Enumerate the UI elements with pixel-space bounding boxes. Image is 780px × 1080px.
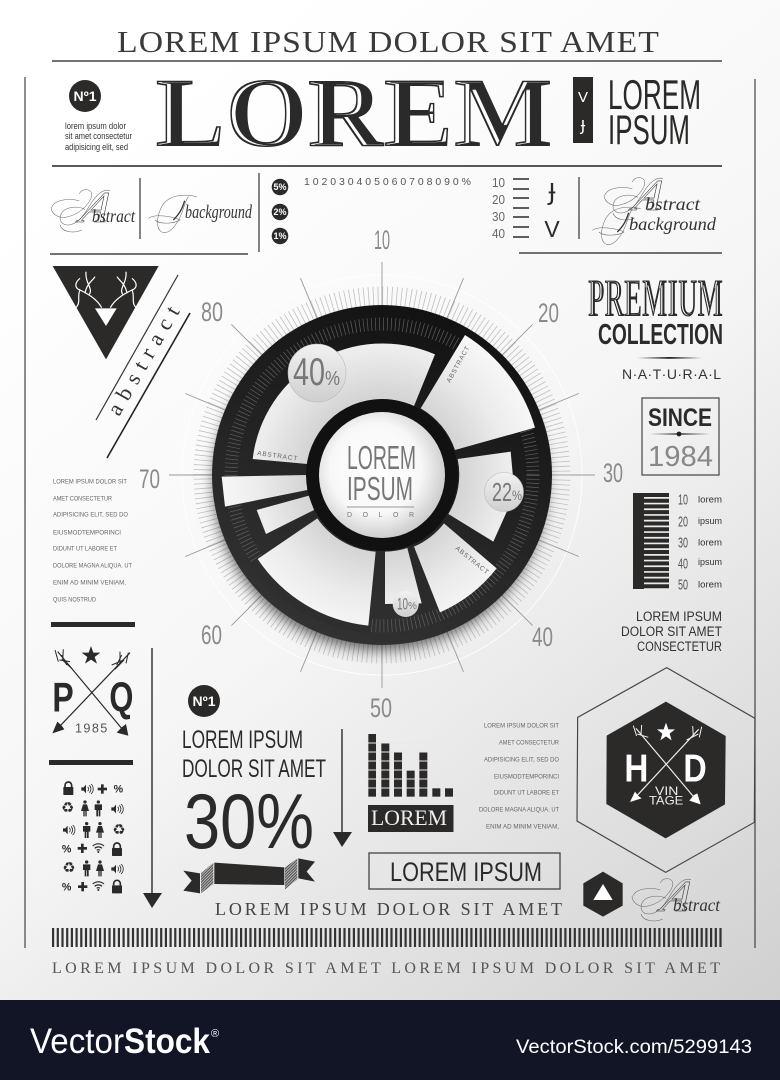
- badge: No 1 top: [69, 80, 101, 112]
- PQ crossed arrows emblem: Q: [109, 675, 133, 721]
- bubble 10%: 10: [397, 594, 408, 614]
- right paragraph: EIUSMODTEMPORINCI: [494, 774, 559, 780]
- script: Abstract: A: [71, 183, 122, 232]
- thick rules: [49, 622, 135, 765]
- title side text: [608, 71, 701, 153]
- hexagon HD vintage emblem: [577, 668, 755, 872]
- percent bullets: 2%: [273, 207, 287, 217]
- bubble 40%: [288, 344, 346, 402]
- dark tag: [573, 77, 593, 143]
- diagonal label: abstract: abstract: [102, 301, 184, 420]
- dial labels: 60: [201, 620, 222, 650]
- icon grid: ♻: [62, 860, 76, 877]
- script: Abstract lower: A: [652, 872, 703, 921]
- long arrow left: [143, 648, 162, 908]
- arrow middle: [333, 729, 352, 847]
- title side text: LOREM: [608, 71, 701, 118]
- wedge labels: ABSTRACT: [454, 545, 490, 576]
- right paragraph: ADIPISICING ELIT, SED DO: [484, 756, 559, 764]
- wedge labels: ABSTRACT: [446, 345, 472, 384]
- center hub: DOLOR: [347, 512, 414, 519]
- scale labels: ipsum: [698, 516, 722, 526]
- dial labels: 40: [532, 622, 553, 652]
- right paragraph: DOLORE MAGNA ALIQUA. UT: [479, 806, 559, 814]
- script: Abstract: bstract: [92, 206, 136, 226]
- pie wedges: [222, 335, 535, 626]
- glyphs t and V: [544, 180, 560, 242]
- top headline: LOREM IPSUM DOLOR SIT AMET: [117, 24, 660, 59]
- title side text: IPSUM: [608, 106, 690, 153]
- dial labels: [139, 225, 623, 723]
- icon grid: [61, 782, 126, 894]
- scale labels: 40: [678, 556, 688, 572]
- hexagon HD vintage emblem: D: [683, 747, 707, 791]
- chart: radial dial: [169, 262, 595, 688]
- left paragraph: DIDUNT UT LABORE ET: [53, 546, 117, 552]
- scale labels: [678, 492, 722, 594]
- left paragraph: ENIM AD MINIM VENIAM,: [53, 580, 126, 586]
- right paragraph: [479, 722, 559, 830]
- heading: lorem ipsum dolor sit amet: DOLOR SIT AMET: [182, 755, 326, 783]
- script: Abstract lower: bstract: [673, 895, 721, 915]
- footer bar: Stock: [124, 1022, 210, 1061]
- main title LOREM: LOREM: [155, 57, 553, 168]
- small intro text: [65, 121, 132, 153]
- PQ crossed arrows emblem: [52, 646, 133, 736]
- dial shadow: [214, 318, 546, 650]
- since 1984 stamp: [642, 398, 719, 475]
- left paragraph: LOREM IPSUM DOLOR SIT: [53, 478, 127, 486]
- lorem tag: LOREM: [371, 805, 447, 830]
- number row: 1 0 2 0 3 0 4 0 5 0 6 0 7 0 8 0 9 0 %: [304, 176, 471, 188]
- script: Abstract background: [592, 171, 717, 245]
- deer triangle emblem: [53, 266, 159, 359]
- left paragraph: ADIPISICING ELIT, SED DO: [53, 512, 128, 518]
- footer bar: Vector: [30, 1022, 124, 1061]
- diagonal label: abstract: [96, 275, 190, 458]
- small intro text: sit amet consectetur: [65, 131, 132, 142]
- script: background: background: [185, 202, 252, 223]
- center hub: IPSUM: [347, 470, 413, 507]
- dial outer guide and major ticks: [169, 262, 595, 688]
- percent bullets: 1%: [273, 231, 287, 241]
- bar chart: [367, 734, 453, 797]
- right paragraph: AMET CONSECTETUR: [499, 740, 559, 746]
- right caption: [621, 609, 722, 654]
- hexagon HD vintage emblem: VIN: [655, 784, 678, 798]
- tapered rule: [637, 357, 702, 359]
- footer bar: ®: [211, 1028, 219, 1040]
- icon grid: ♻: [61, 800, 74, 817]
- dial labels: 80: [201, 297, 223, 327]
- icon grid: %: [62, 843, 72, 855]
- badge: No 1 lower: Nº1: [192, 693, 216, 709]
- scale labels: 50: [678, 576, 688, 594]
- bubble 10%: [393, 591, 419, 617]
- right caption: CONSECTETUR: [637, 639, 722, 654]
- bubble 40%: 40: [293, 351, 325, 394]
- scale labels: ipsum: [698, 557, 722, 567]
- ribbon: [183, 858, 315, 893]
- footer bar: [0, 1000, 780, 1080]
- left paragraph: [53, 478, 132, 604]
- icon grid: %: [62, 882, 72, 894]
- hexagon HD vintage emblem: TAGE: [649, 794, 683, 808]
- bottom caption: LOREM IPSUM DOLOR SIT AMET LOREM IPSUM DOLOR SIT AMET: [52, 960, 720, 977]
- script: Abstract lower: [632, 872, 721, 921]
- scale 10-40: 40: [492, 226, 505, 241]
- icon grid: ♻: [112, 821, 126, 838]
- bubble 40%: %: [325, 368, 340, 390]
- dial labels: 20: [538, 298, 559, 328]
- script: Abstract background: bstract: [645, 194, 701, 214]
- scale labels: lorem: [698, 580, 722, 590]
- dark tag: Ɉ: [580, 117, 586, 135]
- bubble 22%: [484, 472, 524, 512]
- right caption: LOREM IPSUM: [636, 609, 722, 624]
- PQ crossed arrows emblem: 1985: [75, 722, 107, 736]
- script: Abstract background: background: [629, 214, 717, 234]
- hexagon HD vintage emblem: H: [624, 747, 648, 791]
- dial labels: 30: [603, 458, 623, 488]
- glyphs t and V: V: [544, 216, 560, 242]
- bubble 22%: %: [512, 487, 522, 503]
- glyphs t and V: Ɉ: [547, 180, 556, 206]
- right paragraph: ENIM AD MINIM VENIAM,: [486, 824, 559, 830]
- dial labels: 10: [374, 225, 390, 255]
- dial labels: 70: [139, 464, 160, 494]
- left paragraph: DOLORE MAGNA ALIQUA. UT: [53, 562, 132, 570]
- scale labels: 10: [678, 492, 688, 508]
- big number 30%: 30%: [184, 777, 314, 865]
- scale 10-40: [492, 175, 529, 241]
- boxed label: [369, 853, 560, 889]
- badge: No 1 lower: [188, 685, 220, 717]
- since 1984 stamp: SINCE: [648, 404, 712, 432]
- small intro text: adipisicing elit, sed: [65, 142, 128, 153]
- small intro text: lorem ipsum dolor: [65, 121, 126, 132]
- scale 10-40: 10: [492, 175, 505, 190]
- barcode strip: [52, 928, 724, 947]
- natural label: N·A·T·U·R·A·L: [622, 366, 721, 382]
- dial labels: 50: [370, 693, 392, 723]
- scale labels: lorem: [698, 494, 722, 504]
- dark ring: [212, 305, 552, 645]
- inner tick ring: [231, 324, 533, 626]
- icon grid: %: [114, 784, 124, 796]
- bubble 22%: 22: [492, 477, 512, 507]
- left paragraph: EIUSMODTEMPORINCI: [53, 530, 121, 536]
- scale labels: lorem: [698, 538, 722, 548]
- heading: lorem ipsum dolor sit amet: LOREM IPSUM: [182, 726, 303, 754]
- wedge labels: [257, 345, 490, 576]
- since 1984 stamp: 1984: [648, 441, 713, 473]
- right paragraph: DIDUNT UT LABORE ET: [494, 790, 559, 796]
- striped scale bar: [633, 493, 656, 589]
- boxed label: LOREM IPSUM: [390, 857, 542, 887]
- dark tag: V: [578, 89, 588, 106]
- serif caption: LOREM IPSUM DOLOR SIT AMET: [215, 899, 562, 919]
- script: Abstract background: A: [624, 171, 675, 220]
- right caption: DOLOR SIT AMET: [621, 624, 722, 639]
- wedge labels: ABSTRACT: [257, 450, 298, 463]
- script: Abstract: [51, 183, 136, 232]
- center hub: LOREM: [347, 439, 416, 476]
- right paragraph: LOREM IPSUM DOLOR SIT: [484, 722, 559, 730]
- center hub: [306, 399, 458, 551]
- percent bullets: 5%: [273, 182, 287, 192]
- PQ crossed arrows emblem: P: [52, 675, 74, 721]
- frame lines: [25, 61, 755, 948]
- left paragraph: AMET CONSECTETUR: [53, 496, 112, 502]
- badge: No 1 top: Nº1: [73, 88, 97, 104]
- left paragraph: QUIS NOSTRUD: [53, 596, 96, 604]
- scale 10-40: 30: [492, 209, 505, 224]
- scale labels: 30: [678, 534, 688, 552]
- small hexagon icon: [583, 872, 623, 917]
- script: background: [148, 195, 252, 233]
- bubble 10%: %: [408, 601, 417, 612]
- scale labels: 20: [678, 514, 688, 530]
- scale 10-40: 20: [492, 192, 505, 207]
- percent bullets: [272, 179, 288, 244]
- footer bar: VectorStock.com/5299143: [516, 1037, 752, 1058]
- heading: lorem ipsum dolor sit amet: [182, 726, 326, 783]
